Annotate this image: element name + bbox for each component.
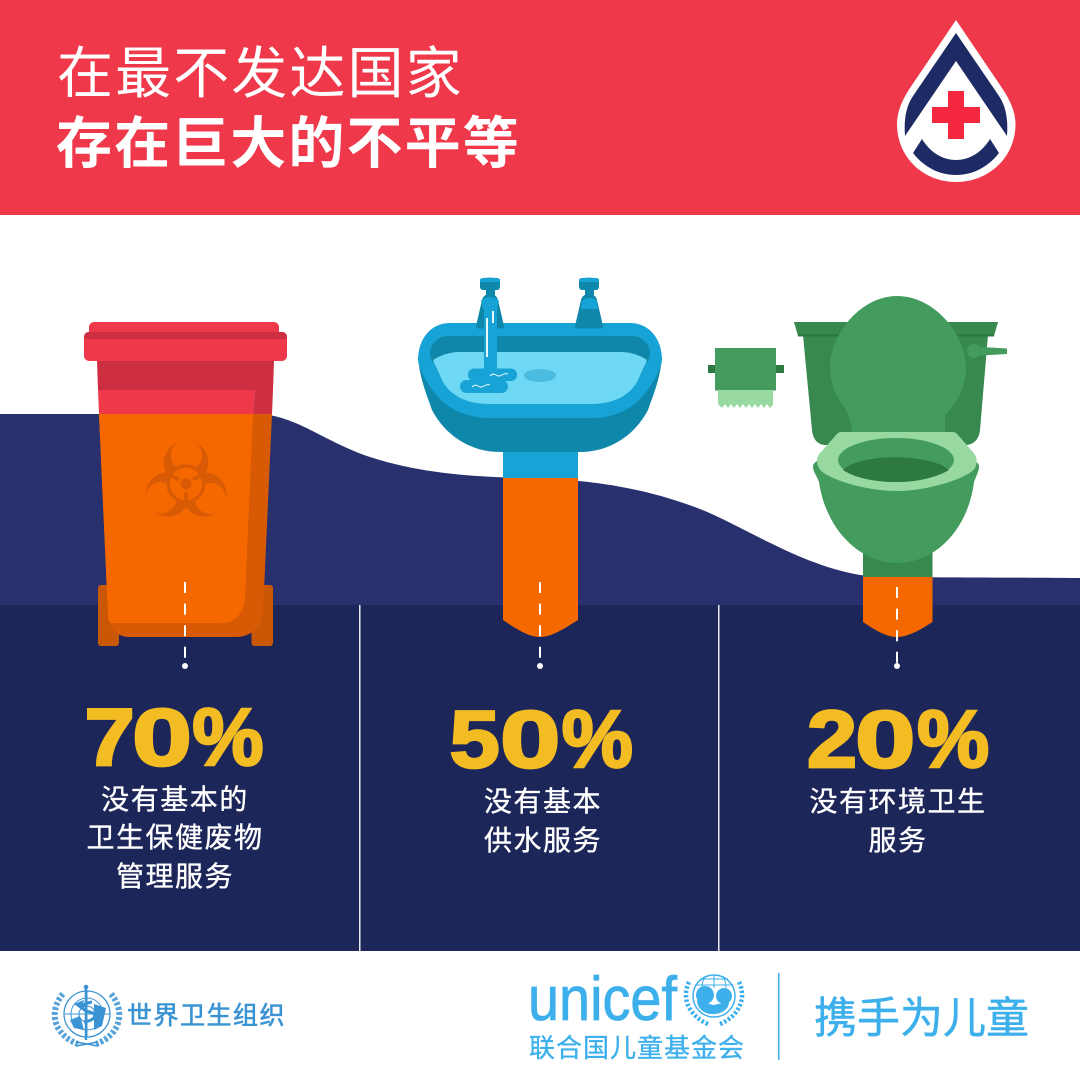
left tap	[476, 278, 504, 328]
dashed pointer: toilet	[894, 587, 900, 669]
dashed pointer: bin	[182, 582, 188, 669]
figure 20%: 2	[807, 694, 857, 785]
header banner	[0, 0, 1080, 215]
WHO name: 世界卫生组织	[127, 1002, 286, 1030]
toilet seat	[817, 432, 977, 491]
icon: toilet paper roll	[708, 348, 784, 408]
title: 在最不发达国家	[57, 42, 464, 105]
caption: water	[484, 786, 602, 856]
figure 50%: %	[562, 695, 633, 785]
caption: waste: 卫生保健废物	[86, 822, 264, 853]
figure 70%: %	[192, 693, 264, 783]
right tap	[575, 278, 603, 328]
basin pedestal	[503, 445, 578, 637]
icon: wash basin	[418, 278, 662, 637]
figure 70%	[85, 692, 264, 783]
bin lid	[84, 322, 287, 361]
running water	[460, 308, 517, 393]
figure 70%: 7	[85, 692, 135, 783]
caption: waste: 管理服务	[116, 861, 234, 892]
UNICEF name: 联合国儿童基金会	[529, 1033, 745, 1063]
stat: 20%	[807, 694, 989, 856]
basin drain	[524, 369, 556, 382]
title	[56, 42, 521, 175]
caption: waste: 没有基本的	[101, 784, 249, 815]
logo: WHO	[55, 985, 286, 1046]
title: 存在巨大的不平等	[56, 112, 521, 175]
bin wheels	[98, 585, 273, 646]
stat: 50%	[450, 694, 633, 856]
caption: waste	[86, 784, 264, 892]
toilet tank	[794, 322, 1007, 445]
figure 20%	[807, 694, 989, 785]
figure 50%	[450, 694, 633, 785]
toilet lid	[830, 296, 966, 434]
dashed pointer: basin	[537, 582, 543, 669]
figure 50%: 5	[450, 694, 500, 785]
figure 20%: 0	[855, 695, 915, 785]
caption: water: 没有基本	[484, 786, 602, 817]
figure 50%: 0	[500, 695, 560, 785]
toilet neck	[863, 545, 932, 637]
icon: toilet	[794, 296, 1007, 637]
UNICEF wordmark: unicef	[528, 965, 678, 1034]
figure 20%: %	[917, 695, 989, 785]
logo: UNICEF	[528, 965, 745, 1063]
caption: sanitation: 服务	[868, 825, 928, 856]
caption: sanitation	[809, 786, 987, 856]
background hill	[0, 414, 1080, 610]
caption: sanitation: 没有环境卫生	[809, 786, 987, 817]
lower data panel	[0, 605, 1080, 951]
WHO emblem	[55, 985, 119, 1046]
toilet bowl	[813, 450, 979, 563]
caption: water: 供水服务	[484, 825, 602, 856]
icon: medical waste bin	[84, 322, 287, 646]
icon: water drop with cross	[897, 20, 1016, 182]
UNICEF emblem	[686, 975, 742, 1024]
figure 70%: 0	[132, 692, 192, 783]
slogan: 携手为儿童	[814, 995, 1029, 1043]
stat: 70%	[85, 692, 264, 892]
icon: biohazard symbol	[138, 441, 234, 524]
